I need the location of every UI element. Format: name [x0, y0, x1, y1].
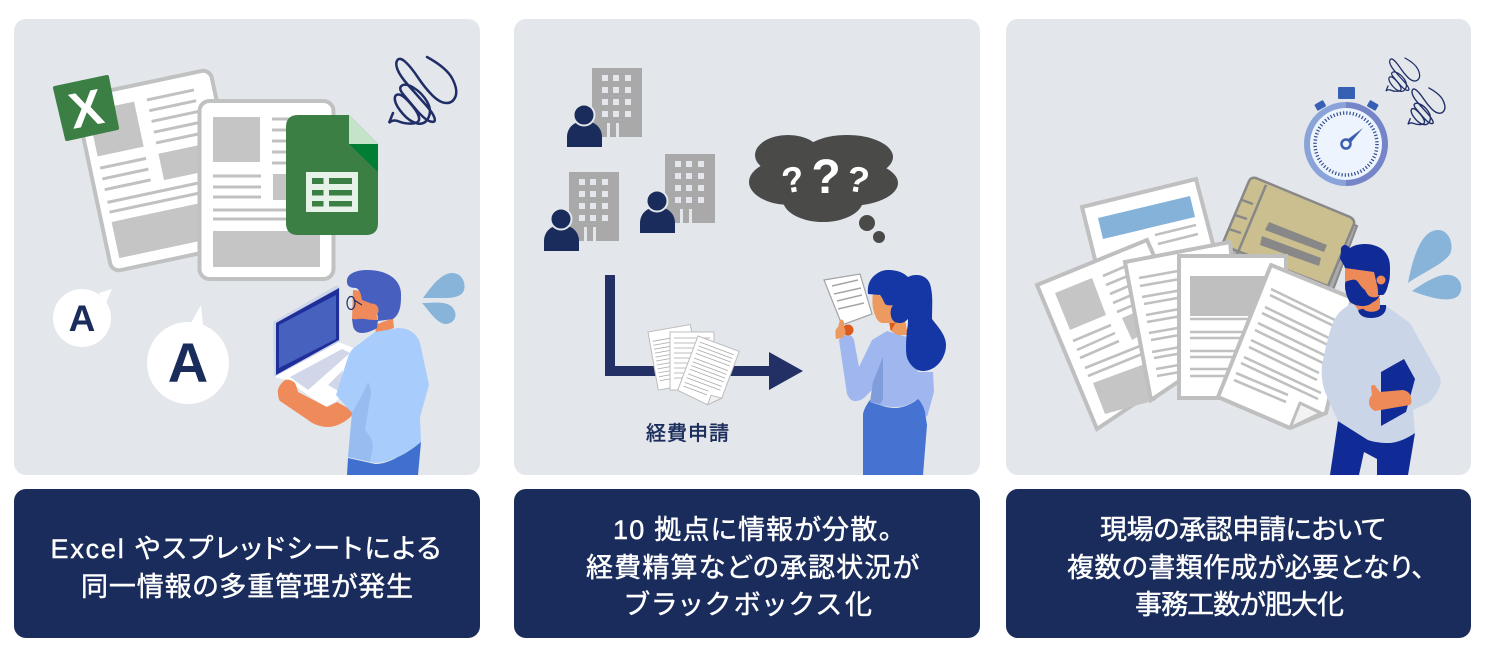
icon: stopwatch: [1304, 87, 1388, 186]
caption card: panel 1: 同一情報の多重管理が発生: [81, 572, 413, 602]
icon: stack of documents: [648, 325, 739, 409]
caption card: panel 3: 現場の承認申請において: [1100, 515, 1386, 545]
document: left sheet: [1037, 240, 1200, 429]
arrow: [605, 275, 803, 390]
caption card: panel 2: ブラックボックス化: [625, 590, 872, 620]
panel: scattered approval information: [514, 19, 980, 475]
thought bubble: ?: [811, 151, 841, 204]
icon: office with person 2: [544, 172, 619, 251]
thought bubble: [749, 135, 898, 243]
document: second sheet: [1125, 242, 1240, 400]
speech bubble: small A: [53, 289, 112, 347]
caption card: panel 3: 複数の書類作成が必要となり、: [1067, 553, 1425, 583]
person: man with laptop: [273, 270, 429, 475]
document: third sheet: [1179, 256, 1286, 398]
thought bubble: ?: [779, 157, 807, 202]
document: tilted back page: [75, 69, 247, 272]
speech bubble: large A: A: [168, 331, 208, 394]
icon: scribble: [389, 57, 456, 124]
icon: spreadsheet file: [286, 115, 378, 235]
thought bubble: ?: [844, 157, 872, 202]
caption card: panel 2: 経費精算などの承認状況が: [586, 553, 919, 583]
caption card: panel 2: 10 拠点に情報が分散。: [613, 515, 892, 545]
panel: paperwork burden: [1006, 19, 1471, 475]
document: front sheet with folded corner: [1218, 265, 1352, 428]
person: man with clipboard: [1322, 244, 1441, 475]
caption card: panel 3: [1006, 489, 1471, 638]
icon: sweat drops: [422, 273, 464, 324]
icon: small scribbles: [1386, 58, 1445, 125]
icon: office with person 1: [567, 68, 642, 147]
speech bubble: small A: A: [69, 298, 95, 339]
icon: office with person 3: [640, 154, 715, 233]
icon: sweat drops: [1408, 230, 1461, 299]
caption card: panel 1: Excel やスプレッドシートによる: [50, 534, 441, 564]
speech bubble: large A: [147, 305, 229, 404]
caption card: panel 1: [14, 489, 480, 638]
icon: Excel: X: [64, 78, 108, 140]
label: expense request: 経費申請: [646, 422, 730, 445]
person: woman reading a document: [824, 270, 946, 475]
icon: Excel: [55, 77, 117, 140]
icon: notebook: [1222, 178, 1357, 290]
caption card: panel 2: [514, 489, 980, 638]
document: front page: [200, 101, 334, 279]
panel: duplicated spreadsheet management: [14, 19, 480, 475]
caption card: panel 3: 事務工数が肥大化: [1135, 590, 1344, 620]
document: blue header sheet: [1082, 179, 1225, 320]
